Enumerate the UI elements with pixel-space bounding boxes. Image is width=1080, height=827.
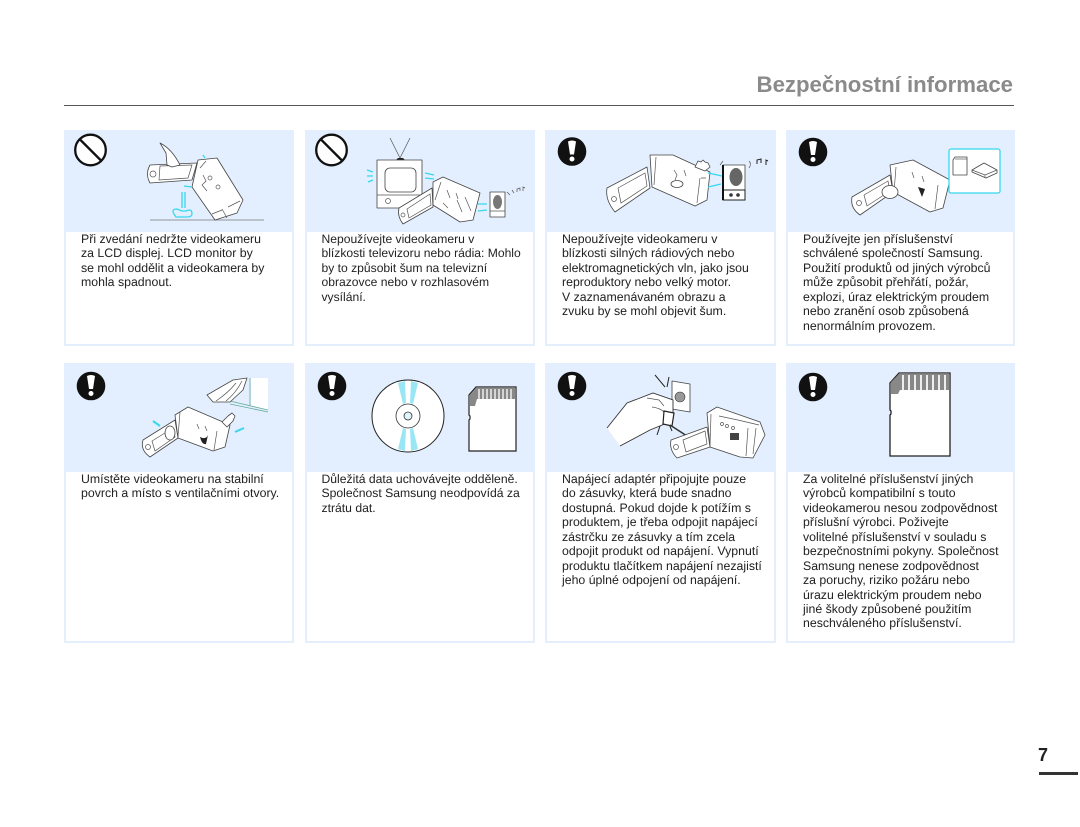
illustration: camera with accessories [852, 149, 1000, 215]
text block: obrazovce nebo v rozhlasovém [322, 275, 489, 289]
text block: příslušní výrobci. Poživejte [803, 515, 949, 529]
text block: Důležitá data uchovávejte odděleně. [322, 472, 518, 486]
text block: zvuku by se mohl objevit šum. [562, 304, 726, 318]
text block: volitelné příslušenství v souladu s [803, 530, 986, 544]
text block: Samsung nenese zodpovědnost [803, 559, 979, 573]
icon: caution sign [558, 372, 586, 400]
panel: LCD handling warning [64, 130, 294, 346]
text block: se mohl oddělit a videokamera by [81, 261, 264, 275]
text block: videokamerou nesou zodpovědnost [803, 501, 997, 515]
icon: prohibited sign [75, 135, 106, 165]
text block: výrobců kompatibilní s touto [803, 486, 956, 500]
text block: Umístěte videokameru na stabilní [81, 472, 264, 486]
text block: blízkosti silných rádiových nebo [562, 246, 734, 260]
text block: dostupná. Pokud dojde k potížím s [562, 501, 751, 515]
text block: za poruchy, riziko požáru nebo [803, 573, 970, 587]
text block: zástrčku ze zásuvky a tím zcela [562, 530, 735, 544]
text block: ztrátu dat. [322, 501, 376, 515]
illustration: memory card [890, 373, 950, 456]
text block: Nepoužívejte videokameru v [562, 232, 717, 246]
panel: optional accessories [786, 363, 1015, 643]
text block: Za volitelné příslušenství jiných [803, 472, 973, 486]
panel: radio waves warning [545, 130, 776, 346]
illustration: television [367, 138, 434, 208]
panel: power adapter [545, 363, 776, 643]
panel: data backup [305, 363, 535, 643]
text block [81, 232, 264, 289]
text block: produktu tlačítkem napájení nezajistí [562, 559, 762, 573]
panel: approved accessories [786, 130, 1015, 346]
text block [562, 472, 762, 587]
text block [81, 472, 279, 500]
text block: by to způsobit šum na televizní [322, 261, 487, 275]
text block: do zásuvky, která bude snadno [562, 486, 732, 500]
illustration: curtain and window [207, 378, 268, 412]
text block: povrch a místo s ventilačními otvory. [81, 486, 279, 500]
panel: TV and radio warning [305, 130, 535, 346]
text block: schválené společností Samsung. [803, 246, 983, 260]
text block: za LCD displej. LCD monitor by [81, 246, 253, 260]
text block: Použití produktů od jiných výrobců [803, 261, 991, 275]
panel: ventilation [64, 363, 294, 643]
text block: může způsobit přehřátí, požár, [803, 275, 969, 289]
icon: caution sign [318, 372, 346, 400]
illustration: camera held by the LCD [148, 143, 264, 220]
text block: elektromagnetických vln, jako jsou [562, 261, 749, 275]
illustration: camcorder [671, 407, 765, 458]
text block: nebo zranění osob způsobená [803, 304, 969, 318]
title: Bezpečnostní informace [757, 72, 1013, 97]
page number: 7 [1038, 745, 1048, 765]
text block: blízkosti televizoru nebo rádia: Mohlo [322, 246, 521, 260]
text block: neschváleného příslušenství. [803, 616, 962, 630]
text block: V zaznamenávaném obrazu a [562, 290, 726, 304]
icon: caution sign [799, 138, 827, 166]
illustration: hand unplugging adapter [607, 375, 690, 446]
text block: Napájecí adaptér připojujte pouze [562, 472, 746, 486]
illustration: compact disc [372, 380, 444, 452]
text block: produktem, je třeba odpojit napájecí [562, 515, 758, 529]
illustration: camera with airflow arrows [142, 407, 244, 457]
text block: nenormálním provozem. [803, 319, 936, 333]
text block: jeho úplné odpojení od napájení. [562, 573, 741, 587]
text block: Při zvedání nedržte videokameru [81, 232, 261, 246]
text block: mohla spadnout. [81, 275, 172, 289]
text block [562, 232, 749, 318]
illustration: camera and speaker [398, 177, 525, 224]
text block: Společnost Samsung neodpovídá za [322, 486, 520, 500]
icon: caution sign [77, 372, 105, 400]
text block: úrazu elektrickým proudem nebo [803, 588, 982, 602]
text block [802, 472, 999, 630]
text block: explozi, úraz elektrickým proudem [803, 290, 989, 304]
text block [803, 232, 991, 333]
illustration: camera near speaker [607, 155, 768, 212]
text block: Nepoužívejte videokameru v [322, 232, 474, 246]
text block: bezpečnostními pokyny. Společnost [803, 544, 999, 558]
text block: reproduktory nebo velký motor. [562, 275, 731, 289]
text block: Používejte jen příslušenství [803, 232, 953, 246]
illustration: memory card [469, 387, 516, 451]
text block [322, 472, 520, 515]
icon: caution sign [558, 137, 586, 166]
text block [322, 232, 521, 304]
text block: jiné škody způsobené použitím [803, 602, 971, 616]
text block: vysílání. [322, 290, 366, 304]
icon: caution sign [799, 373, 827, 401]
text block: odpojit produkt od napájení. Vypnutí [562, 544, 759, 558]
icon: prohibited sign [316, 135, 347, 165]
